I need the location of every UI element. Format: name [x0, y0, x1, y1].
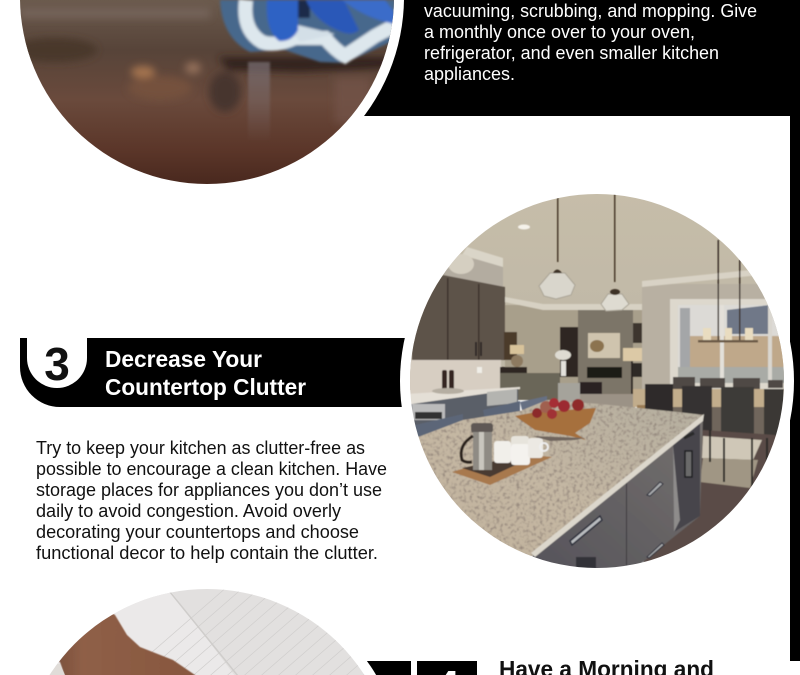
- backsplash: [405, 360, 501, 394]
- hand: [58, 614, 196, 675]
- number box: [417, 661, 477, 675]
- text block: step 2 description: [424, 1, 757, 84]
- white ring: top photo: [10, 0, 404, 194]
- window frame: [670, 299, 790, 389]
- lower counter: [405, 387, 520, 406]
- left wall and soffit: [442, 259, 503, 286]
- text block: step 2 description: a monthly once over to your oven,: [424, 22, 695, 42]
- window view: [679, 306, 778, 336]
- art, lamp, console: [504, 332, 517, 360]
- island cabinets: [530, 418, 703, 575]
- panel: step 3 header bar: [20, 338, 410, 407]
- heading: Decrease Your Countertop Clutter: Decrease Your: [105, 346, 262, 372]
- white ring: notebook photo: [10, 579, 404, 675]
- text block: step 2 description: vacuuming, scrubbing, and mopping. Give: [424, 1, 757, 21]
- number tab: [27, 338, 87, 388]
- wine bottles: [442, 370, 447, 390]
- cloth shadow: [220, 0, 395, 63]
- back wall: [505, 305, 645, 395]
- text block: step 3 description: possible to encourage a clean kitchen. Have: [36, 459, 387, 479]
- text block: step 3 description: [36, 438, 387, 563]
- stone fireplace: [578, 310, 633, 394]
- fold line: [170, 592, 244, 675]
- floor lamp: [623, 348, 642, 361]
- cloth: [245, 0, 394, 56]
- wooden tray: [452, 455, 552, 485]
- photo: modern kitchen with granite island: [405, 190, 792, 575]
- floor: [642, 430, 776, 562]
- text block: step 3 description: decorating your countertops and choose: [36, 522, 359, 542]
- apples: [532, 398, 584, 419]
- heading: Decrease Your Countertop Clutter: [105, 346, 306, 400]
- blue glove fingers: [267, 0, 298, 41]
- beige background corner: [50, 664, 65, 675]
- shelf with vase and flowers: [560, 327, 578, 377]
- panel: step 4 header bar: [340, 656, 714, 675]
- text block: step 3 description: Try to keep your kitchen as clutter-free as: [36, 438, 365, 458]
- text block: step 2 description: appliances.: [424, 64, 515, 84]
- right wall: [642, 284, 765, 389]
- mugs: [494, 436, 548, 465]
- white ring: kitchen photo: [400, 184, 794, 578]
- text block: step 3 description: functional decor to help contain the clutter.: [36, 543, 378, 563]
- step number 3: 3: [44, 338, 70, 390]
- text block: step 2 description: refrigerator, and even smaller kitchen: [424, 43, 719, 63]
- decor above cabinet: [448, 254, 474, 274]
- dark cabinets: [412, 275, 505, 360]
- panel: right black border bar: [790, 116, 800, 661]
- photo: gloved hand wiping dark wood table: [20, 0, 394, 184]
- panel: top black section: [340, 0, 800, 116]
- dining table and chairs: [673, 377, 695, 389]
- french press: [461, 423, 493, 470]
- stools: [416, 414, 463, 437]
- heading: Decrease Your Countertop Clutter: Countertop Clutter: [105, 374, 306, 400]
- text block: step 3 description: daily to avoid congestion. Avoid overly: [36, 501, 341, 521]
- text block: step 3 description: storage places for appliances you don’t use: [36, 480, 382, 500]
- recessed light: [518, 224, 530, 230]
- granite countertop: [418, 400, 703, 556]
- wooden bowl: [515, 408, 596, 440]
- notebook ruled lines: [152, 590, 364, 675]
- chandelier: [718, 240, 719, 340]
- photo: open notebook and hand: [50, 589, 364, 675]
- pendant lights: [518, 190, 758, 342]
- notebook left page: [58, 593, 234, 675]
- sofa: [500, 373, 560, 400]
- dark fold between fingers: [296, 0, 310, 18]
